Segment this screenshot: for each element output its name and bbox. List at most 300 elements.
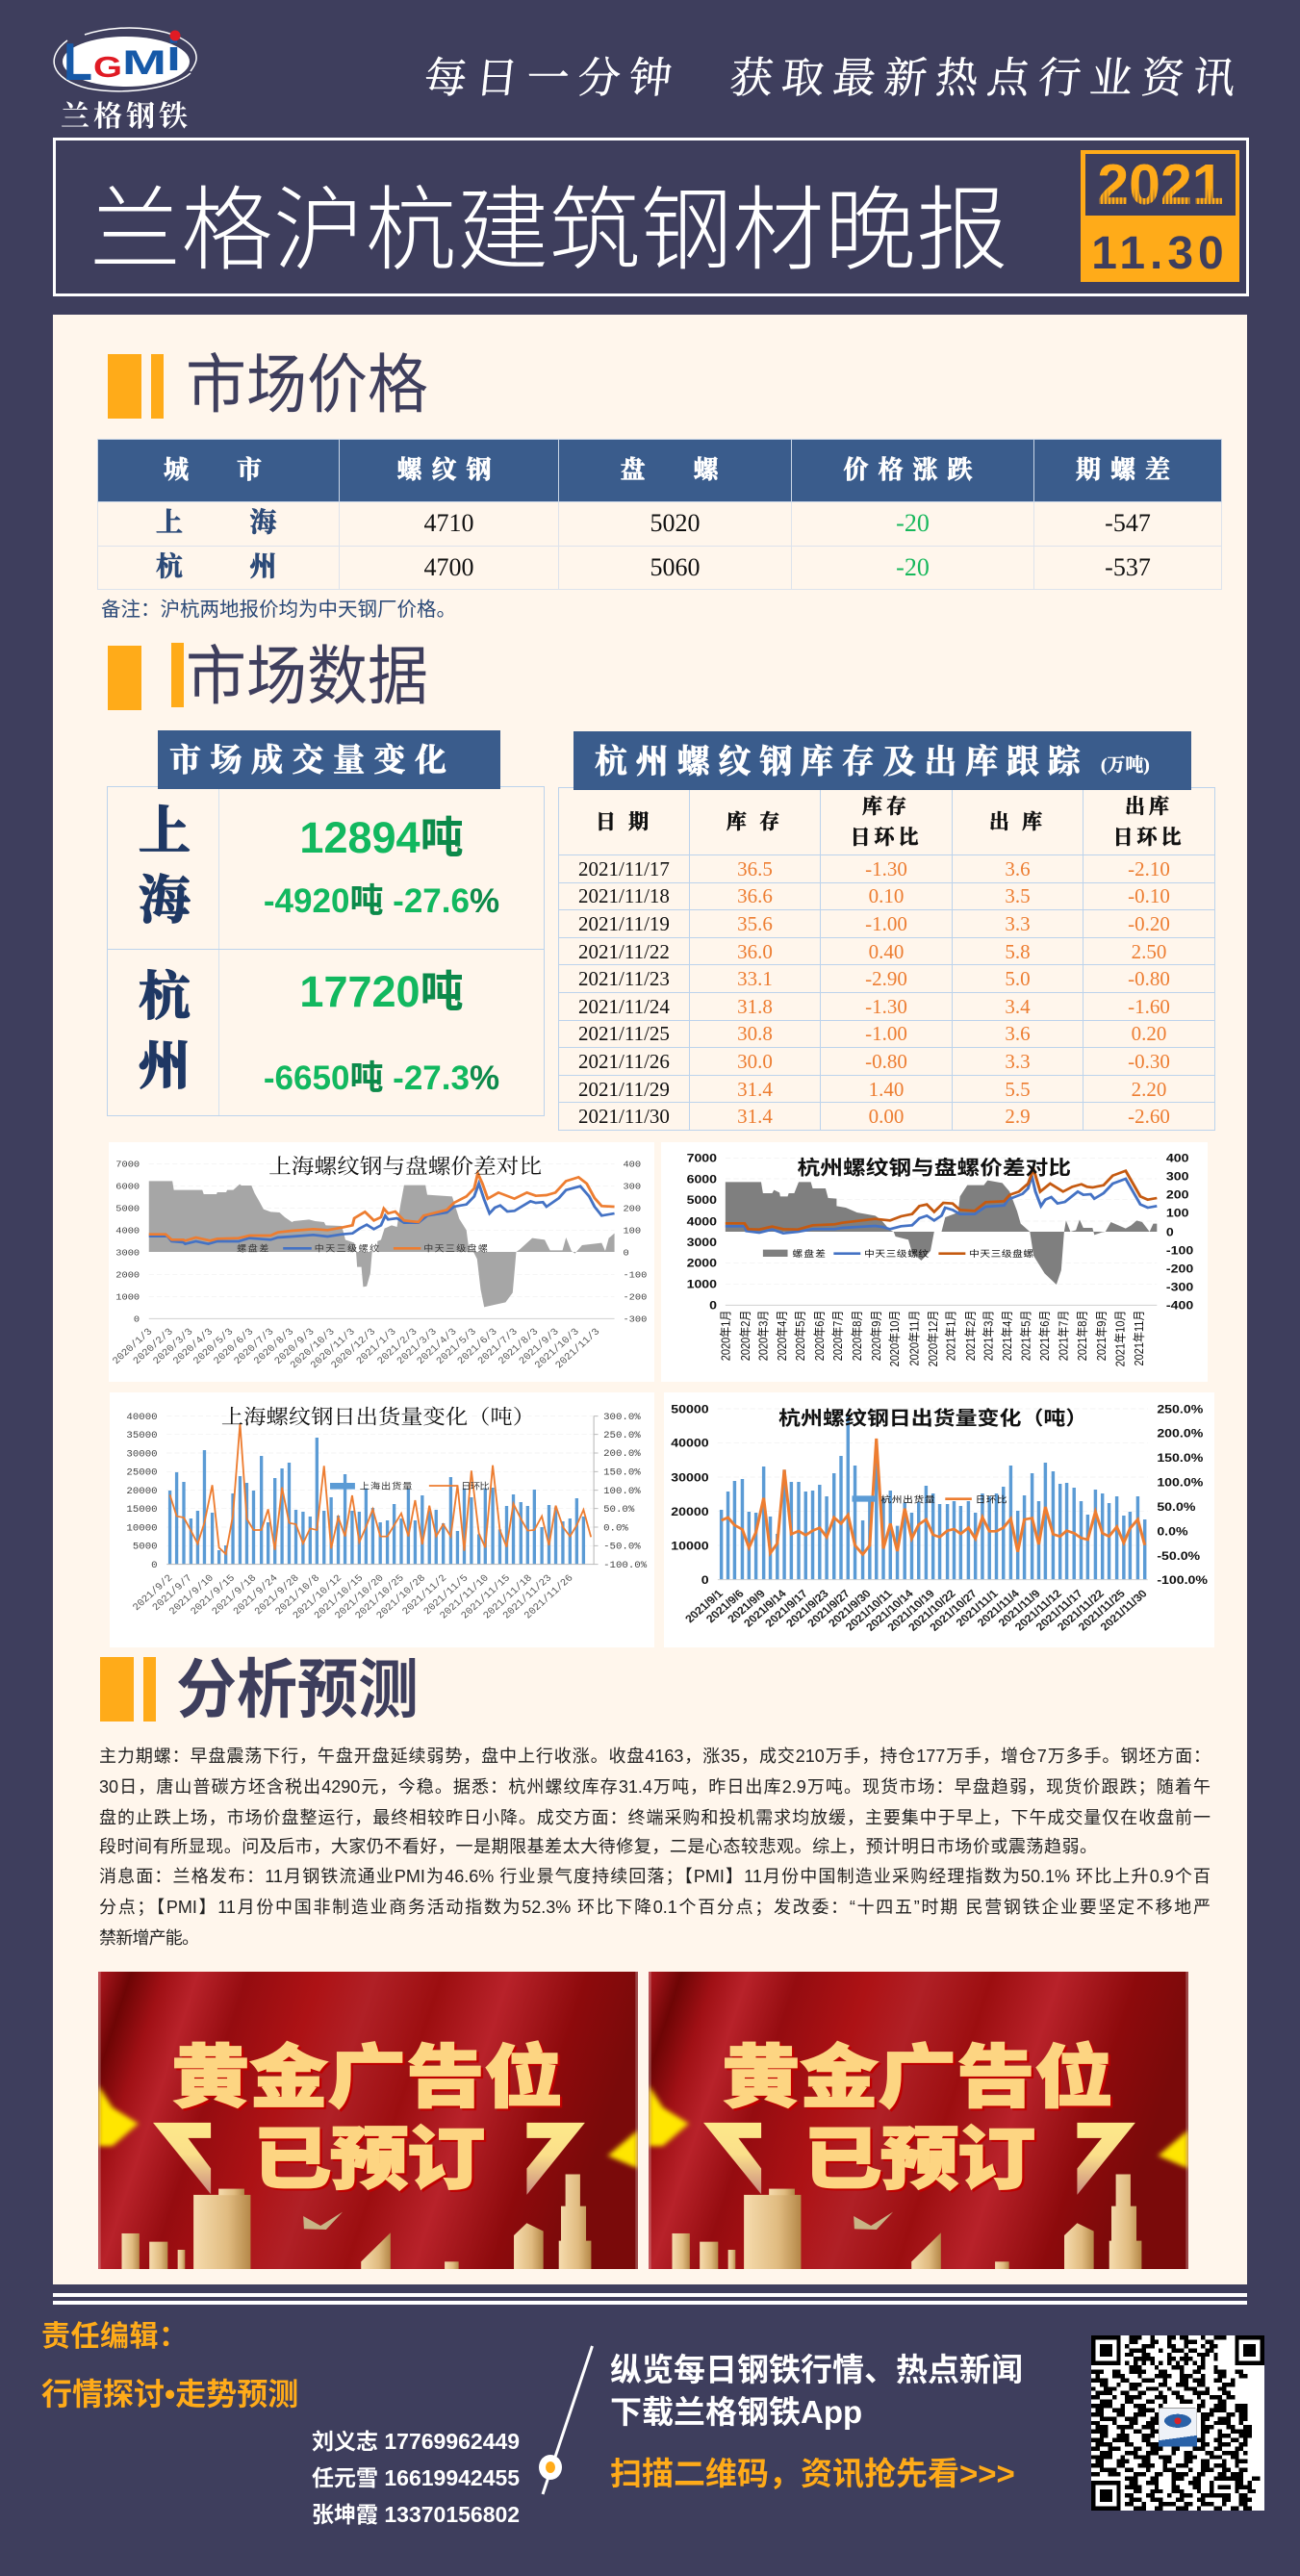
table: inventory tracking: 31.4 [737, 1105, 773, 1128]
footer divider lines [53, 2293, 1247, 2305]
chart: hangzhou daily shipments: 日环比 [976, 1493, 1007, 1505]
chart: hangzhou daily shipments: 200.0% [1157, 1427, 1204, 1440]
table: inventory tracking: -0.10 [1128, 884, 1170, 907]
chart: shanghai price spread: 中天三级螺纹 [315, 1243, 380, 1255]
hangzhou volume label: 州 [139, 1037, 191, 1095]
chart: hangzhou daily shipments: 150.0% [1157, 1451, 1204, 1465]
chart: shanghai daily shipments [110, 1392, 654, 1647]
chart: hangzhou price spread: 1000 [687, 1278, 717, 1290]
ad banner left [98, 1972, 638, 2269]
section marker: market price [108, 354, 164, 419]
table: inventory tracking: -1.30 [865, 995, 907, 1018]
table: inventory tracking: 2021/11/22 [578, 940, 670, 963]
chart: shanghai price spread: 2020/9/3 [272, 1327, 318, 1367]
table: inventory tracking: 2.50 [1132, 940, 1166, 963]
chart: hangzhou price spread: 2020年1月 [719, 1311, 733, 1361]
chart: shanghai daily shipments: 2021/11/10 [438, 1573, 492, 1621]
contact list: 任元雪 16619942455 [312, 2465, 520, 2490]
chart: hangzhou price spread: -400 [1166, 1299, 1193, 1312]
chart: hangzhou price spread: 2020年6月 [812, 1311, 827, 1361]
chart: shanghai daily shipments: 150.0% [603, 1467, 642, 1478]
hangzhou volume label: 杭 [139, 968, 191, 1026]
chart: hangzhou daily shipments: 250.0% [1157, 1402, 1204, 1416]
chart: hangzhou price spread: 2021年8月 [1076, 1311, 1089, 1361]
chart: hangzhou price spread: 2021年3月 [981, 1311, 996, 1361]
chart: shanghai price spread: 300 [623, 1182, 641, 1192]
analysis text: 消息面：兰格发布：11月钢铁流通业PMI为46.6% 行业景气度持续回落；【PMI】11月份中国制造业采购经理指数为50.1% 环比上升0.9个百 [99, 1867, 1211, 1886]
table: price: -20 [896, 553, 930, 581]
table: inventory tracking: 2.9 [1005, 1105, 1031, 1128]
table: inventory tracking: 日环比 [851, 826, 922, 849]
chart: shanghai daily shipments: 2021/11/18 [481, 1573, 535, 1621]
chart: shanghai daily shipments: 2021/10/20 [333, 1573, 387, 1621]
title box [53, 138, 1249, 296]
chart: shanghai daily shipments: 2021/11/26 [523, 1573, 576, 1621]
table: inventory tracking: -0.20 [1128, 912, 1170, 935]
table: price: -547 [1105, 509, 1151, 537]
table: inventory tracking: 2021/11/18 [578, 884, 670, 907]
chart: shanghai daily shipments: 300.0% [603, 1412, 642, 1423]
chart: hangzhou price spread: 5000 [687, 1193, 717, 1207]
chart: hangzhou daily shipments: -50.0% [1157, 1549, 1200, 1563]
table: inventory tracking: -0.80 [1128, 967, 1170, 990]
chart: shanghai price spread: 2020/6/3 [212, 1327, 256, 1367]
table: inventory tracking: -2.60 [1128, 1105, 1170, 1128]
inventory table heading: (万吨) [1101, 755, 1150, 776]
chart: hangzhou price spread: 2021年4月 [1000, 1311, 1014, 1361]
chart: hangzhou daily shipments: 2021/9/9 [725, 1587, 769, 1625]
chart: shanghai price spread: 2021/11/3 [553, 1327, 602, 1371]
chart: hangzhou price spread: 7000 [687, 1152, 717, 1164]
chart: hangzhou price spread: 400 [1166, 1152, 1188, 1164]
table: inventory tracking: 3.6 [1005, 857, 1031, 880]
heading: market data: 市场数据 [186, 641, 428, 713]
header logo: LGMI: L [64, 32, 92, 91]
table: inventory tracking: 33.1 [737, 967, 773, 990]
chart: shanghai price spread: 上海螺纹钢与盘螺价差对比 [268, 1151, 542, 1180]
slogan: 每日一分钟 [421, 55, 683, 102]
chart: shanghai daily shipments: 40000 [126, 1412, 158, 1423]
chart: shanghai price spread: 2021/7/3 [475, 1327, 521, 1367]
table: inventory tracking: 5.5 [1005, 1078, 1031, 1101]
table: price: -20 [896, 509, 930, 537]
chart: shanghai price spread: 2020/7/3 [232, 1327, 277, 1367]
chart: hangzhou daily shipments: 2021/9/6 [703, 1587, 747, 1625]
chart: hangzhou daily shipments: 2021/9/14 [741, 1587, 789, 1629]
chart: hangzhou daily shipments: 2021/9/27 [804, 1587, 854, 1629]
table: inventory tracking: 3.6 [1005, 1022, 1031, 1045]
table: price: 4710 [423, 509, 473, 537]
slogan [421, 55, 1247, 102]
chart: shanghai price spread: 200 [623, 1204, 641, 1214]
chart: shanghai daily shipments: 0.0% [603, 1523, 629, 1534]
chart: hangzhou price spread: 2020年8月 [850, 1311, 864, 1361]
table: inventory tracking: 3.5 [1005, 884, 1031, 907]
chart: shanghai daily shipments: 2021/11/23 [501, 1573, 554, 1621]
chart: shanghai daily shipments: 5000 [133, 1542, 158, 1552]
chart: shanghai price spread: 2021/1/3 [354, 1327, 399, 1367]
chart: shanghai price spread: 2021/5/3 [434, 1327, 479, 1367]
chart: shanghai daily shipments: 2021/9/2 [131, 1573, 175, 1614]
table: inventory tracking: 0.00 [869, 1105, 904, 1128]
heading: analysis: 分析预测 [176, 1654, 419, 1726]
shanghai volume label: 海 [139, 872, 191, 930]
analysis text: 段时间有所显现。问及后市，大家仍不看好，一是期限基差太大待修复，二是心态较悲观。综上，预计明日市场价或震荡趋弱。 [99, 1837, 1097, 1856]
chart: shanghai price spread: 400 [623, 1160, 641, 1170]
table: inventory tracking: 2021/11/30 [578, 1105, 670, 1128]
hangzhou volume label [139, 968, 191, 1095]
chart: hangzhou daily shipments: 50000 [671, 1402, 709, 1416]
table: inventory tracking: 5.8 [1005, 940, 1031, 963]
chart: shanghai daily shipments: 2021/10/28 [374, 1573, 428, 1621]
chart: shanghai price spread: 2021/4/3 [415, 1327, 460, 1367]
app promo line 1: 纵览每日钢铁行情、热点新闻 [610, 2352, 1023, 2387]
ad banner left: 黄金广告位 [171, 2023, 563, 2121]
chart: hangzhou daily shipments: 2021/9/23 [783, 1587, 831, 1629]
chart: hangzhou price spread: -200 [1166, 1262, 1193, 1275]
table: inventory tracking: 0.40 [869, 940, 904, 963]
analysis text: 盘的止跌上场，市场价盘整运行，最终相较昨日小降。成交方面：终端采购和投机需求均放缓，主要集中于早上，下午成交量仅在收盘前一 [99, 1808, 1211, 1827]
chart: hangzhou price spread: 2021年5月 [1019, 1311, 1033, 1361]
chart: hangzhou daily shipments: 0 [701, 1573, 709, 1587]
chart: shanghai price spread: 2021/8/3 [497, 1327, 541, 1367]
table: inventory tracking: 3.3 [1005, 1050, 1031, 1073]
chart: shanghai daily shipments: 35000 [126, 1430, 158, 1441]
chart: shanghai daily shipments: 2021/10/8 [273, 1573, 322, 1618]
chart: shanghai price spread: 100 [623, 1226, 641, 1237]
table: inventory tracking: 36.5 [737, 857, 773, 880]
date: 11.30 [1091, 228, 1229, 279]
chart: hangzhou daily shipments: 2021/9/30 [826, 1587, 874, 1629]
chart: shanghai price spread: 中天三级盘螺 [423, 1243, 488, 1255]
table: price: 螺纹钢 [396, 456, 500, 484]
chart: hangzhou price spread: 2020年12月 [926, 1311, 940, 1366]
chart: shanghai daily shipments: 250.0% [603, 1430, 642, 1441]
chart: shanghai daily shipments: 上海出货量 [360, 1480, 413, 1492]
hangzhou volume: 17720吨 [299, 967, 464, 1016]
chart: hangzhou daily shipments: 40000 [671, 1437, 709, 1449]
chart: shanghai price spread: 6000 [115, 1182, 140, 1192]
table: inventory tracking: 31.8 [737, 995, 773, 1018]
chart: shanghai daily shipments: 2021/9/10 [167, 1573, 217, 1618]
chart: shanghai price spread: -200 [623, 1292, 647, 1303]
table: inventory tracking: -1.60 [1128, 995, 1170, 1018]
chart: hangzhou price spread: 杭州螺纹钢与盘螺价差对比 [798, 1156, 1071, 1179]
editor label: 责任编辑： [41, 2321, 189, 2353]
chart: shanghai price spread: 2021/10/3 [533, 1327, 582, 1371]
analysis text: 分点；【PMI】11月份中国非制造业商务活动指数为52.3% 环比下降0.1个百分点；发改委：“十四五”时期 民营钢铁企业要坚定不移地严 [99, 1898, 1211, 1917]
chart: shanghai price spread: 2021/3/3 [395, 1327, 440, 1367]
chart: hangzhou price spread: 2020年9月 [869, 1311, 883, 1361]
shanghai change: -4920吨 -27.6% [264, 882, 499, 920]
table: inventory tracking: 30.8 [737, 1022, 773, 1045]
chart: shanghai price spread: 2021/2/3 [375, 1327, 421, 1367]
analysis text [99, 1747, 1211, 1948]
main title: 兰格沪杭建筑钢材晚报 [89, 180, 1008, 282]
shanghai volume: 12894吨 [299, 813, 464, 862]
chart: hangzhou price spread: 螺盘差 [792, 1248, 826, 1260]
analysis text: 30日，唐山普碳方坯含税出4290元，今稳。据悉：杭州螺纹库存31.4万吨，昨日出库2.9万吨。现货市场：早盘趋弱，现货价跟跌；随着午 [99, 1777, 1211, 1797]
chart: shanghai price spread: 2020/10/3 [289, 1327, 338, 1371]
chart: hangzhou daily shipments: 2021/10/14 [863, 1587, 916, 1634]
table: inventory tracking: 2021/11/23 [578, 967, 670, 990]
chart: shanghai price spread: 螺盘差 [237, 1243, 268, 1255]
chart: hangzhou daily shipments: 30000 [671, 1470, 709, 1484]
divider with dot [539, 2346, 594, 2494]
chart: hangzhou daily shipments: 2021/11/9 [995, 1587, 1043, 1629]
chart: shanghai price spread: 2021/6/3 [455, 1327, 500, 1367]
shanghai volume label: 上 [139, 803, 191, 860]
chart: hangzhou price spread [661, 1142, 1208, 1382]
chart: shanghai daily shipments: 2021/9/7 [150, 1573, 195, 1614]
chart: shanghai daily shipments: 200.0% [603, 1448, 642, 1460]
chart: shanghai daily shipments: -100.0% [603, 1560, 648, 1571]
chart: shanghai price spread: 2021/9/3 [517, 1327, 562, 1367]
table: inventory tracking: -2.90 [865, 967, 907, 990]
chart: shanghai price spread: 2020/4/3 [171, 1327, 216, 1367]
table: inventory tracking: 日环比 [1112, 826, 1185, 849]
chart: shanghai price spread: 2020/8/3 [252, 1327, 296, 1367]
contact list: 张坤霞 13370156802 [312, 2502, 520, 2527]
chart: shanghai price spread: 2020/3/3 [151, 1327, 196, 1367]
chart: shanghai daily shipments: 2021/10/15 [312, 1573, 366, 1621]
table: inventory tracking: 2021/11/19 [578, 912, 670, 935]
chart: shanghai daily shipments: 2021/10/12 [291, 1573, 344, 1621]
chart: hangzhou price spread: 2021年10月 [1113, 1311, 1128, 1366]
chart: hangzhou price spread: -300 [1166, 1281, 1193, 1293]
table: price: 价格涨跌 [843, 456, 981, 484]
header logo: LGMI: i [166, 31, 181, 80]
chart: shanghai daily shipments: 2021/11/15 [459, 1573, 513, 1621]
chart: shanghai price spread: 1000 [115, 1292, 140, 1303]
chart: shanghai daily shipments: 2021/9/24 [231, 1573, 281, 1618]
chart: hangzhou price spread: 100 [1166, 1207, 1188, 1219]
chart: hangzhou daily shipments: 2021/10/11 [843, 1587, 896, 1633]
chart: hangzhou daily shipments: 0.0% [1157, 1525, 1188, 1538]
chart: hangzhou daily shipments: 2021/11/22 [1055, 1587, 1108, 1633]
analysis text: 主力期螺：早盘震荡下行，午盘开盘延续弱势，盘中上行收涨。收盘4163，涨35，成交210万手，持仓177万手，增仓7万多手。钢坯方面： [99, 1747, 1211, 1766]
chart: hangzhou price spread: 2021年2月 [963, 1311, 978, 1361]
analysis text: 禁新增产能。 [99, 1928, 198, 1948]
table: inventory tracking: 5.0 [1005, 967, 1031, 990]
hangzhou change: -6650吨 -27.3% [264, 1059, 499, 1097]
chart: shanghai price spread: 7000 [115, 1160, 140, 1170]
heading: market price: 市场价格 [186, 349, 428, 421]
table: inventory tracking: 2021/11/26 [578, 1050, 670, 1073]
header logo: LGMI: 兰格钢铁 [61, 92, 191, 135]
table: inventory tracking: 2021/11/25 [578, 1022, 670, 1045]
header logo: LGMI: G [93, 50, 122, 84]
chart: shanghai price spread: 2020/1/3 [111, 1327, 155, 1367]
table: inventory tracking: 库 存 [726, 810, 783, 833]
chart: hangzhou daily shipments: 2021/10/19 [884, 1587, 938, 1634]
chart: shanghai daily shipments: -50.0% [603, 1542, 642, 1552]
table: inventory tracking: 0.10 [869, 884, 904, 907]
chart: hangzhou price spread: 2020年11月 [907, 1311, 922, 1365]
chart: hangzhou daily shipments: 50.0% [1157, 1500, 1196, 1514]
ad banner right: 已预订 [803, 2104, 1035, 2203]
table: price: 城 市 [164, 456, 273, 484]
chart: hangzhou price spread: 0 [709, 1299, 717, 1312]
ad banner right [649, 1972, 1188, 2269]
chart: shanghai daily shipments: 25000 [126, 1467, 158, 1478]
ad banner left: 已预订 [253, 2104, 485, 2203]
chart: shanghai daily shipments: 10000 [126, 1523, 158, 1534]
main cream panel [53, 315, 1247, 2284]
table: price: 5020 [650, 509, 701, 537]
table: inventory tracking: 30.0 [737, 1050, 773, 1073]
chart: shanghai price spread: 4000 [115, 1226, 140, 1237]
table: inventory tracking: 库存 [862, 795, 910, 818]
table: inventory tracking: -2.10 [1128, 857, 1170, 880]
chart: shanghai price spread: -100 [623, 1270, 647, 1281]
chart: shanghai daily shipments: 15000 [126, 1504, 158, 1516]
date badge [1081, 150, 1239, 282]
chart: hangzhou daily shipments: 2021/11/25 [1075, 1587, 1128, 1633]
chart: shanghai daily shipments: 2021/11/2 [400, 1573, 449, 1618]
chart: shanghai daily shipments: 上海螺纹钢日出货量变化（吨） [221, 1401, 535, 1430]
chart: hangzhou daily shipments: 2021/11/30 [1097, 1587, 1150, 1633]
table: price: -537 [1105, 553, 1151, 581]
chart: hangzhou price spread: 2020年7月 [830, 1311, 845, 1361]
year panel [1085, 154, 1236, 216]
chart: hangzhou daily shipments: 杭州螺纹钢日出货量变化（吨） [778, 1407, 1087, 1429]
chart: hangzhou daily shipments: 100.0% [1157, 1476, 1204, 1489]
chart: shanghai price spread: 2020/2/3 [131, 1327, 176, 1367]
chart: hangzhou price spread: 2020年4月 [775, 1311, 789, 1361]
app promo line 2: 下载兰格钢铁App [610, 2394, 862, 2430]
chart: hangzhou daily shipments: 2021/11/1 [953, 1587, 1001, 1629]
shanghai volume label [139, 803, 191, 930]
chart: shanghai price spread: -300 [623, 1314, 647, 1325]
header logo: LGMI: M [122, 44, 166, 82]
table: inventory tracking: -0.30 [1128, 1050, 1170, 1073]
chart: shanghai price spread: 2000 [115, 1270, 140, 1281]
chart: hangzhou daily shipments [664, 1392, 1214, 1647]
chart: shanghai price spread [109, 1142, 654, 1382]
inventory table heading: 杭州螺纹钢库存及出库跟踪 [595, 745, 1089, 780]
editor tagline: 行情探讨•走势预测 [41, 2377, 298, 2411]
contact list [312, 2429, 520, 2527]
table: inventory tracking: 0.20 [1132, 1022, 1166, 1045]
table: inventory tracking: -1.00 [865, 1022, 907, 1045]
chart: shanghai daily shipments: 30000 [126, 1449, 158, 1460]
table: price: 5060 [650, 553, 701, 581]
table: price: 杭 州 [156, 552, 281, 582]
table: inventory tracking: 日 期 [596, 810, 652, 833]
chart: shanghai daily shipments: 100.0% [603, 1486, 642, 1497]
volume table heading: 市场成交量变化 [169, 744, 456, 778]
chart: hangzhou price spread: 3000 [687, 1236, 717, 1249]
table: inventory tracking: 3.4 [1005, 995, 1031, 1018]
inventory table heading [574, 731, 1191, 790]
contact list: 刘义志 17769962449 [312, 2429, 520, 2454]
table: inventory tracking: 35.6 [737, 912, 773, 935]
table: inventory tracking: 1.40 [869, 1078, 904, 1101]
chart: shanghai price spread: 2020/11/3 [309, 1327, 358, 1371]
chart: hangzhou price spread: 0 [1166, 1225, 1174, 1238]
chart: shanghai daily shipments: 2021/9/15 [189, 1573, 238, 1618]
chart: hangzhou price spread: 2021年6月 [1037, 1311, 1052, 1361]
chart: hangzhou price spread: 2000 [687, 1257, 717, 1269]
chart: hangzhou daily shipments: 2021/10/22 [905, 1587, 958, 1634]
table: price: 4700 [423, 553, 473, 581]
chart: shanghai daily shipments: 2021/9/18 [210, 1573, 259, 1618]
chart: shanghai daily shipments: 2021/10/25 [353, 1573, 407, 1621]
chart: hangzhou daily shipments: 2021/11/17 [1032, 1587, 1085, 1633]
chart: shanghai price spread: 3000 [115, 1248, 140, 1258]
chart: hangzhou daily shipments: 杭州出货量 [880, 1493, 935, 1505]
chart: shanghai price spread: 5000 [115, 1204, 140, 1214]
table: inventory tracking: 2021/11/24 [578, 995, 670, 1018]
slogan: 获取最新热点行业资讯 [727, 55, 1247, 102]
table: inventory tracking [558, 787, 1215, 1131]
chart: hangzhou daily shipments: 2021/9/1 [682, 1587, 726, 1625]
table: inventory tracking: 出库 [1125, 795, 1173, 818]
section marker: analysis [100, 1657, 156, 1722]
chart: hangzhou price spread: 4000 [687, 1214, 717, 1228]
table: inventory tracking: -1.30 [865, 857, 907, 880]
table: inventory tracking: 2021/11/29 [578, 1078, 670, 1101]
table: inventory tracking: 31.4 [737, 1078, 773, 1101]
chart: hangzhou price spread: 2020年2月 [738, 1311, 752, 1361]
ad banner right: 黄金广告位 [722, 2023, 1113, 2121]
chart: hangzhou price spread: 中天三级螺纹 [864, 1248, 929, 1260]
table: inventory tracking: -1.00 [865, 912, 907, 935]
table: inventory tracking: 出 库 [989, 810, 1046, 833]
chart: hangzhou price spread: -100 [1166, 1243, 1193, 1257]
chart: hangzhou price spread: 2021年7月 [1057, 1311, 1071, 1361]
table: inventory tracking: 2.20 [1132, 1078, 1166, 1101]
table: price: 盘 螺 [620, 456, 729, 484]
table: inventory tracking: -0.80 [865, 1050, 907, 1073]
table: price: 期螺差 [1076, 456, 1180, 484]
chart: shanghai daily shipments: 日环比 [461, 1481, 490, 1492]
panel: volume table [107, 786, 545, 1116]
chart: shanghai daily shipments: 20000 [126, 1486, 158, 1497]
table: inventory tracking: 3.3 [1005, 912, 1031, 935]
chart: hangzhou price spread: 中天三级盘螺 [969, 1248, 1033, 1260]
table: price: 上 海 [156, 508, 281, 538]
table: inventory tracking: 36.6 [737, 884, 773, 907]
chart: hangzhou daily shipments: 10000 [671, 1539, 709, 1552]
chart: shanghai price spread: 2020/5/3 [191, 1327, 236, 1367]
chart: shanghai daily shipments: 0 [151, 1560, 158, 1571]
chart: hangzhou daily shipments: 2021/10/27 [927, 1587, 981, 1634]
chart: hangzhou price spread: 2021年9月 [1094, 1311, 1109, 1361]
chart: hangzhou price spread: 2021年11月 [1132, 1311, 1146, 1365]
chart: hangzhou daily shipments: -100.0% [1157, 1573, 1208, 1587]
chart: hangzhou price spread: 2021年1月 [944, 1311, 958, 1361]
chart: shanghai daily shipments: 2021/11/5 [421, 1573, 472, 1618]
chart: shanghai daily shipments: 2021/9/28 [253, 1573, 302, 1618]
chart: hangzhou daily shipments: 2021/9/17 [762, 1587, 811, 1629]
qr code [1091, 2335, 1264, 2511]
chart: hangzhou price spread: 2020年10月 [887, 1311, 902, 1366]
chart: hangzhou price spread: 2020年5月 [793, 1311, 807, 1361]
volume table heading [158, 730, 500, 789]
chart: hangzhou daily shipments: 2021/11/4 [974, 1587, 1023, 1629]
chart: hangzhou daily shipments: 2021/11/12 [1012, 1587, 1065, 1633]
table: inventory tracking: 2021/11/17 [578, 857, 670, 880]
chart: hangzhou price spread: 2020年3月 [756, 1311, 771, 1361]
chart: shanghai price spread: 0 [623, 1248, 629, 1258]
chart: shanghai price spread: 0 [134, 1314, 140, 1325]
section marker: market data [108, 643, 184, 710]
chart: hangzhou price spread: 6000 [687, 1172, 717, 1186]
table: inventory tracking: 36.0 [737, 940, 773, 963]
chart: hangzhou daily shipments: 20000 [671, 1505, 709, 1518]
